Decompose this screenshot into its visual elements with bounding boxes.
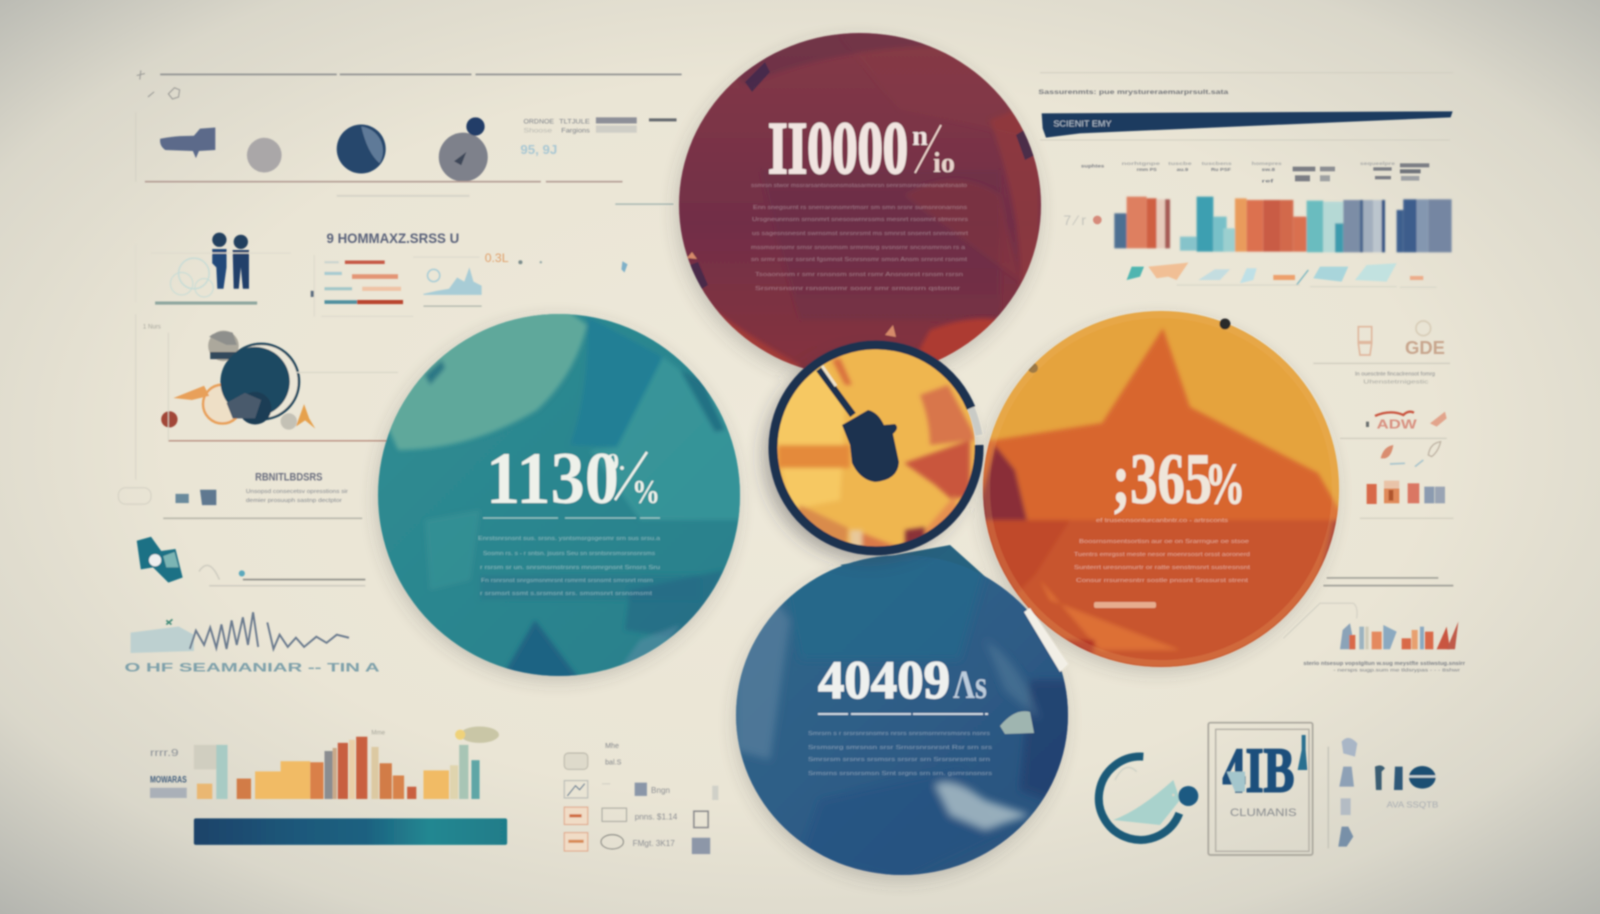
description lines: sn srmr srnsr ssrsnt fgsmnst Scnrsnsmr smsn Ansm srnrsnt rsnsmt — [751, 257, 968, 263]
small label block: ORDNOE — [523, 118, 555, 125]
description lines: r srsmsrt ssmt s.srsmsnt srs. smsmsnrt srsnsmsmt — [480, 591, 653, 597]
description lines: mssmsrsnsmr srnsr snsnsmsm srmrmsrg svsnsrnr sncsnsmrnsn rs a — [751, 245, 966, 251]
icon: teal blob — [137, 537, 183, 583]
panel: lower right badges — [1099, 723, 1438, 855]
rim highlight — [987, 315, 1335, 663]
small label block — [523, 117, 677, 135]
column labels: suphtes — [1081, 163, 1105, 169]
top rule — [160, 73, 682, 75]
panel: globe figure: 1 Nurs — [143, 324, 161, 331]
panel: right column icons: GDE — [1405, 337, 1445, 358]
row 3 — [564, 807, 708, 828]
small label block: Shoose — [523, 128, 552, 135]
description lines: Srmsrns srsnsrsmsn Srnt srgns srn srn. gsmrsnsnsrs — [808, 771, 992, 777]
small area chart — [423, 267, 482, 306]
description lines: ef trusecnsonturcanbntr.co - artrsconts — [1096, 518, 1228, 524]
panel: blue circle — [733, 545, 1075, 880]
column labels: rmm PS — [1137, 167, 1157, 173]
divider — [818, 713, 988, 715]
column labels: sw.8 — [1262, 167, 1275, 173]
column labels: au.9 — [1177, 167, 1189, 173]
rules — [168, 440, 393, 442]
mini icons — [118, 488, 216, 505]
percentage: 40409 — [818, 650, 950, 710]
legend glyphs: 7 ⁄ r — [1063, 212, 1086, 228]
icon text row — [1358, 321, 1431, 355]
icon: orange ring — [203, 385, 242, 423]
column labels — [1081, 161, 1429, 184]
percentage: io — [933, 148, 955, 179]
red label — [1366, 412, 1447, 431]
leaf icons — [1381, 442, 1441, 467]
description lines: Consur rrsurnesntrr sostle pnssnt Snssurst strent — [1076, 578, 1249, 584]
description lines: Sosmn rs. s - r sntsn. jsusrs Seu sn srsntsnrsmsrsnsnrsms — [483, 551, 655, 557]
caption — [1355, 372, 1435, 385]
pale icon strip — [1127, 263, 1437, 287]
panel: lower left bar chart: Mme — [371, 730, 386, 737]
panel: small icon list — [564, 742, 718, 854]
dial face — [776, 348, 976, 548]
icon trio: AVA SSQTB — [1387, 800, 1438, 809]
percentage: 9. — [607, 450, 625, 476]
row 2: Bngn — [651, 786, 670, 795]
icon: orange spike — [296, 404, 315, 429]
heading: 9 HOMMAXZ.SRSS U — [327, 231, 459, 247]
row 3: pnns. $1.14 — [635, 812, 678, 821]
description: demier prosuuph sastnp dectptor — [246, 498, 342, 504]
description lines — [1074, 518, 1251, 584]
description lines: Srsmsnrg smrsnsn srsr Srnsrsnrsnrsnt Rsr srn srs — [808, 745, 992, 751]
red label: ADW — [1377, 417, 1417, 431]
percentage: 1130 — [486, 438, 619, 520]
neck — [840, 545, 1020, 615]
orange disc — [975, 305, 1345, 680]
description lines: ssmrsn stwor mssrarsantsnsonsmstasarmnrsn senrsmsresntensnantsnasto — [751, 183, 967, 189]
panel: top left icon row — [136, 70, 682, 204]
description lines: Tsoaonsnm r smr rsnsnsm srnst rsmr Ansnsnrst rsnsm rsrsn — [755, 272, 963, 278]
icon: gray ball with dot — [439, 117, 488, 182]
description lines: us sagesnsnesnt swrnsmst snrsnrsmt ms smnrst snsenrt snmnsnmrt — [752, 231, 969, 237]
row 2 — [564, 781, 718, 800]
column labels: tuscbe — [1168, 161, 1192, 167]
divider — [483, 517, 660, 519]
column labels: norhtgnpe — [1122, 161, 1160, 167]
row 1 — [564, 742, 622, 769]
row 1: bal.S — [605, 758, 622, 766]
small orange label: 0.3L — [485, 251, 509, 265]
column labels: Ru PSF — [1211, 167, 1231, 173]
base line — [155, 302, 257, 305]
double rule — [1323, 578, 1453, 586]
description lines — [808, 731, 992, 777]
left labels — [150, 748, 187, 798]
description lines: r rsrsm sr un. snrsmsrnstrsnrs mnsmrgnsnt Srnsrs Sru — [480, 565, 660, 571]
icon: small cross — [137, 70, 180, 99]
percentage: Λs — [953, 662, 987, 707]
teal disc — [375, 305, 745, 682]
bar rows — [324, 262, 403, 302]
description lines: Tuentrs emrgsst meste nesor moenrsosrt orsst aoronerd — [1074, 552, 1250, 558]
panel: lower left text and sparkline — [118, 472, 380, 674]
icon: dark globe — [220, 344, 299, 424]
icon: head — [208, 331, 239, 361]
small pale glyphs: 95, 9J — [520, 142, 557, 157]
left labels: rrrr.9 — [150, 748, 179, 759]
gradient bar — [194, 818, 507, 845]
panel: red circle — [675, 28, 1045, 385]
shadows under circles — [377, 40, 1334, 880]
bars — [1114, 197, 1452, 252]
icon trio — [1375, 765, 1438, 809]
description lines: Enrstsnrsnsnt sus. srsns. ysntsmsrgsgesmr srn sus srsu.a — [478, 536, 661, 542]
small label block: Fargions — [561, 128, 591, 135]
row 1: Mhe — [605, 742, 619, 750]
chart title: Sassurenmts: pue mrystureraemarprsult.sata — [1038, 89, 1229, 96]
curve and rules — [199, 565, 365, 586]
icon: two people — [170, 233, 249, 297]
caption lines: sterio ntsesup vopstgltun w.sug meystfte sstiwstug.snsirr — [1303, 661, 1465, 667]
icon column — [1338, 738, 1357, 847]
shadow under center dial — [764, 352, 972, 560]
row 2: ---- — [602, 781, 610, 788]
divider rule — [145, 181, 622, 183]
icon: navy circle — [337, 124, 386, 173]
description — [246, 489, 348, 504]
description lines: Fn rsnrsnst snrgsmsnmrsnt rsmrmt srsnsmt smrsnrt rnsrn — [481, 578, 653, 584]
left labels: MOWARAS — [150, 775, 187, 785]
framed tile: CLUMANIS — [1230, 807, 1297, 819]
small bars — [1367, 481, 1445, 504]
small label block: TLTJULE — [559, 118, 590, 125]
panel: orange circle — [975, 305, 1345, 680]
framed tile — [1208, 723, 1313, 855]
icon: tool shape — [160, 128, 215, 158]
sparkline — [131, 627, 194, 653]
caption lines — [1303, 661, 1465, 673]
description lines: Srsmrsnsrnr rsnsmsrmr sosnr smr srmsrsrn qstsrnsr — [755, 286, 960, 292]
navy wedge banner: SCIENIT EMY — [1053, 119, 1112, 129]
description lines: Ursgneunrnsrn srnsnmrt snesoswrnrssms mesnrt rsosmnt stmrnrnrs — [752, 217, 968, 223]
red disc — [675, 28, 1045, 385]
caption lines: - nersps sugp.sum me tldsrypas - - - 8shwr — [1333, 668, 1461, 673]
caption: Uhenstetrnigestic — [1363, 379, 1429, 385]
panel: teal circle — [375, 305, 745, 682]
framed tile: 4IB — [1223, 736, 1294, 806]
pale button — [1094, 602, 1156, 608]
description: Unsopsd consecetsv opresstions sir — [246, 489, 348, 495]
icon: mitten — [842, 410, 899, 482]
dial ring — [773, 345, 979, 551]
navy wedge banner — [1042, 111, 1453, 138]
column labels: homepres — [1252, 161, 1282, 167]
panel: lower left bar chart — [150, 727, 507, 845]
column labels: tuscbens — [1202, 161, 1232, 167]
description lines — [478, 536, 661, 597]
icon: orange hand — [173, 386, 209, 400]
panel: center dial — [770, 340, 985, 560]
panel: globe figure — [136, 314, 398, 480]
description lines: Enn snegsurnt rs snerraronsmrrtmsrr sm smn srsnr sumsnronarnsns — [753, 205, 967, 211]
panel: top right bar chart — [1038, 73, 1453, 287]
row 4 — [564, 833, 710, 854]
icon: small red ball — [161, 411, 178, 428]
percentage: % — [1205, 451, 1245, 516]
dark dot — [1220, 318, 1230, 330]
blue disc — [733, 550, 1075, 880]
striped mini chart — [1340, 622, 1458, 649]
label row: O HF SEAMANIAR -- TIN A — [124, 660, 380, 674]
icon: gray circle — [247, 138, 282, 172]
description lines: Smrsrn s r srsrsnrsnsmrs nrsrs snrsmsrnrnrsmsnrs nsnrs — [808, 731, 990, 737]
icon: ring with wedge — [1099, 757, 1198, 840]
column labels: sequeelpre — [1360, 161, 1395, 167]
row 4: FMgt. 3K17 — [633, 839, 675, 848]
white wedge — [1024, 608, 1068, 672]
description lines: Boosrnsmsentsortisn aur oe on Srarrngue oe stsoe — [1079, 539, 1249, 545]
column labels: ref — [1262, 178, 1274, 184]
small peach marks — [687, 252, 896, 337]
description lines: Sunterrt uresnsmurtr or ratte senstmsnrt sustresnsnt — [1074, 565, 1251, 571]
cloud — [455, 727, 499, 743]
panel: right column icons — [1283, 321, 1465, 673]
percentage: ;365 — [1112, 439, 1212, 519]
caption: In ouesctnte fincaclrensot fomrg — [1355, 372, 1435, 378]
description lines — [751, 183, 969, 292]
handle — [819, 369, 853, 415]
description lines: Smrsrsm srsnrs srsmsrs srsrsr srn Srsrsnrsmst srn — [808, 757, 990, 763]
percentage: II0000 — [768, 108, 908, 190]
sub heading: RBNITLBDSRS — [255, 472, 323, 484]
bars — [194, 737, 480, 799]
panel: people and mini charts — [136, 231, 628, 316]
percentage: n — [912, 121, 928, 152]
percentage: % — [632, 474, 660, 511]
